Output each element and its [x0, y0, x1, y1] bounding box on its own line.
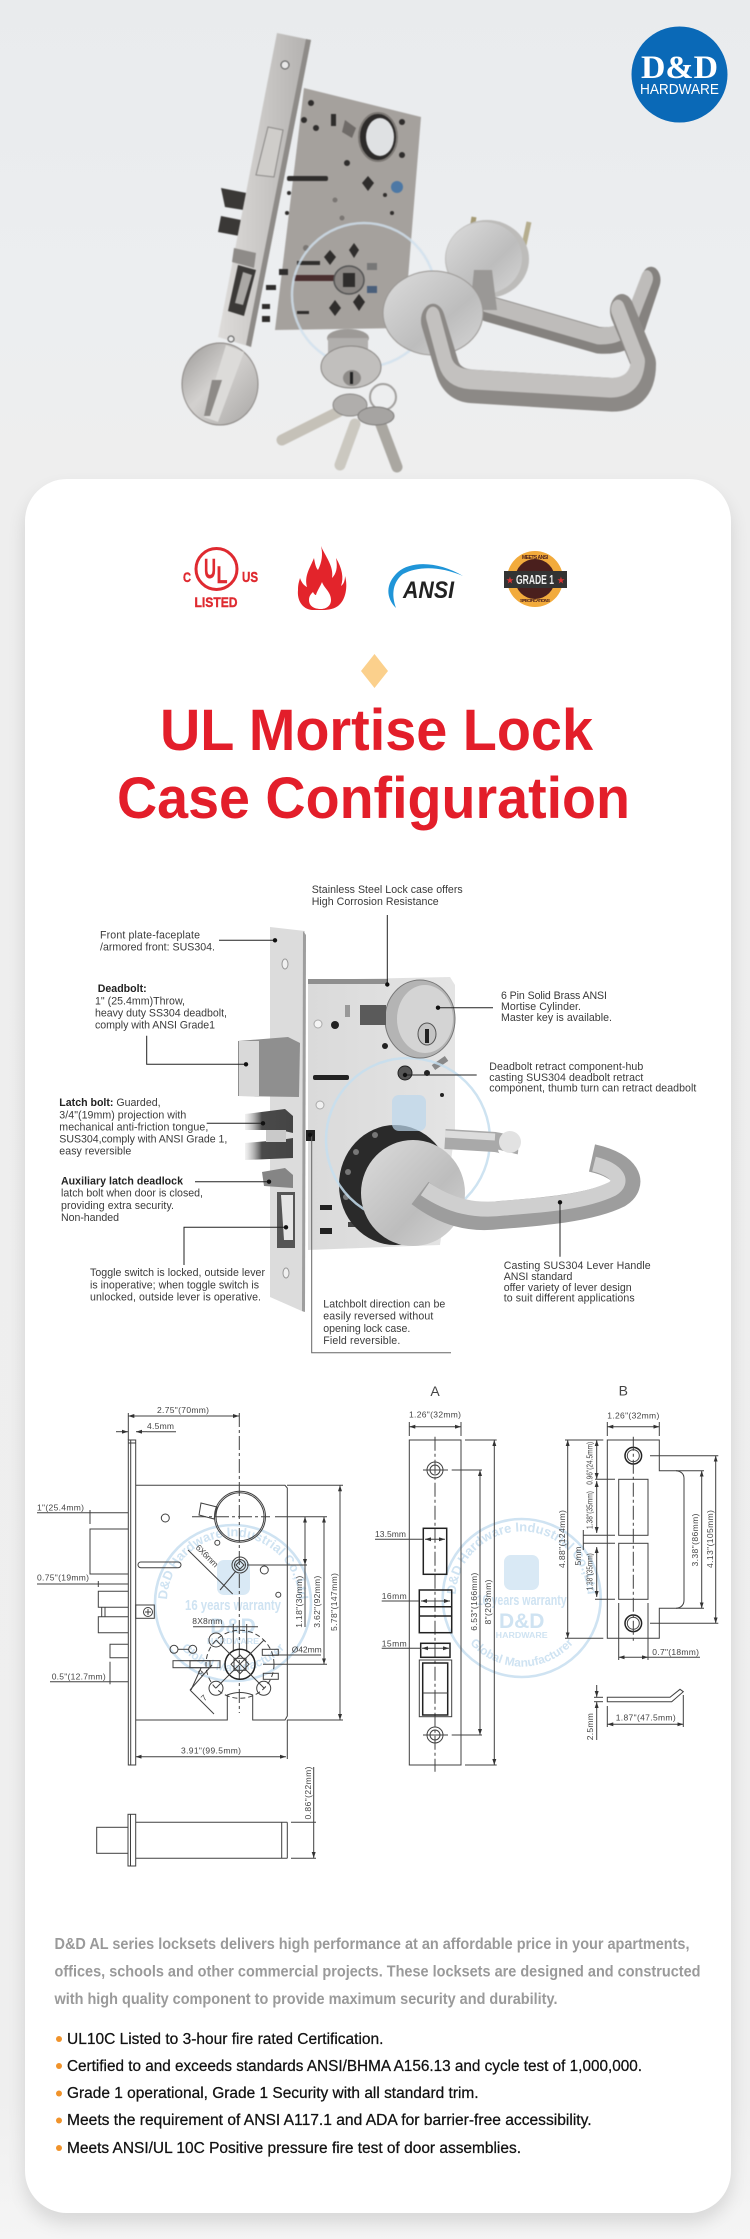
deadbolt outline: 1"(25.4mm) [37, 1503, 84, 1513]
faceplate side [128, 1440, 136, 1765]
deadbolt over plate [238, 1037, 300, 1097]
callout: deadbolt retract: component, thumb turn can retract deadbolt [489, 1083, 696, 1095]
front rose [383, 271, 483, 355]
callout: auxiliary latch: Non-handed [61, 1212, 119, 1224]
label B: B [619, 1382, 628, 1398]
rear lever [486, 279, 651, 340]
dim 1.26 B [607, 1410, 659, 1436]
callout: latch bolt: 3/4"(19mm) projection with [59, 1109, 186, 1121]
dark recess under lever rose [339, 1125, 451, 1245]
cylinder hole [359, 113, 397, 161]
strike windows [619, 1479, 648, 1660]
callout: latch bolt: easy reversible [59, 1146, 131, 1158]
lever rose [361, 1140, 465, 1246]
dim 4.5mm [116, 1421, 176, 1432]
text block: intro paragraph: with high quality component to provide maximum security and durability. [54, 1991, 557, 2008]
strike outline [607, 1440, 684, 1638]
left dims: 4.88"(124mm) [557, 1510, 567, 1568]
dim 1.18: 1.18"(30mm) [294, 1576, 304, 1628]
body outline [136, 1485, 287, 1720]
callout: lever handle: Casting SUS304 Lever Handle [504, 1260, 651, 1272]
watermark: drawing right: D&D [499, 1610, 544, 1633]
thumb turn [182, 343, 258, 425]
Ø42 dim: Ø42mm [292, 1645, 322, 1655]
icon: UL listed: U [204, 553, 216, 584]
bullet 3: Grade 1 operational, Grade 1 Security with all standard trim. [67, 2085, 479, 2102]
watermark: drawing right [441, 1518, 602, 1678]
label 13.5mm [375, 1529, 445, 1539]
screw box [136, 1605, 154, 1618]
technical drawing: lock case side [37, 1405, 343, 1866]
upper hub [188, 1550, 307, 1594]
callout: latch bolt: mechanical anti-friction tongue, [59, 1121, 208, 1133]
icon: Grade 1 badge: ★ [557, 576, 565, 585]
callout: latchbolt direction [308, 1133, 451, 1353]
callout: auxiliary latch: latch bolt when door is closed, [61, 1188, 203, 1200]
product photo: lock set [182, 33, 651, 467]
7 / 9 dims [190, 1665, 214, 1714]
callout: auxiliary latch: providing extra security. [61, 1200, 174, 1212]
icon: Grade 1 badge [504, 551, 567, 607]
watermark ring on lock [326, 1058, 490, 1222]
dim 6.53: 6.53"(166mm) [469, 1573, 479, 1631]
top view of case [97, 1766, 316, 1866]
callout: cylinder [436, 990, 612, 1024]
auxiliary opening [421, 1643, 450, 1657]
watermark: drawing right: 16 years warranty [477, 1593, 567, 1609]
faceplate [218, 33, 311, 347]
watermark logo on lock [392, 1095, 426, 1131]
dim 0.7 [619, 1647, 700, 1657]
left dims: 1.38"(35mm) [584, 1553, 594, 1590]
left dims: 1.38"(35mm) [584, 1491, 594, 1529]
dim 2.5mm [585, 1685, 603, 1740]
icon: UL listed: C [183, 569, 191, 585]
icon: Grade 1 badge: MEETS ANSI [522, 555, 549, 561]
icon: Grade 1 badge: GRADE 1 [516, 572, 554, 587]
watermark: drawing left: HARDWARE [207, 1637, 260, 1646]
faceplate edge [246, 39, 311, 347]
callout: cylinder: Master key is available. [501, 1012, 612, 1024]
callout: lever handle [504, 1200, 651, 1305]
callout: cylinder: 6 Pin Solid Brass ANSI [501, 990, 607, 1002]
icon: ANSI [388, 564, 463, 608]
watermark: drawing left [154, 1524, 312, 1682]
logo: D&D Hardware [632, 26, 728, 122]
7 / 9 dims: 7 [199, 1692, 209, 1703]
left dims: 0.96"(24.5mm) [584, 1442, 594, 1485]
cylinder [321, 329, 381, 388]
dim 1.26 A [409, 1410, 461, 1436]
dim 2.75: 2.75"(70mm) [157, 1405, 209, 1415]
strike side view: 1.87"(47.5mm) [616, 1713, 676, 1723]
plate outline [409, 1440, 461, 1765]
callout: latch bolt: SUS304,comply with ANSI Grade 1, [59, 1134, 227, 1146]
bullet 5: Meets ANSI/UL 10C Positive pressure fire test of door assemblies. [67, 2140, 521, 2157]
dim 1.26 B: 1.26"(32mm) [607, 1410, 659, 1420]
callout: deadbolt retract: casting SUS304 deadbolt retract [489, 1072, 643, 1084]
dim 8: 8"(203mm) [483, 1579, 493, 1624]
watermark: drawing right: HARDWARE [496, 1631, 548, 1640]
left dims [557, 1440, 615, 1638]
Ø42 dim [263, 1645, 327, 1664]
title: Case Configuration [117, 766, 630, 831]
callout: toggle switch: is inoperative; when toggle switch is [90, 1279, 259, 1291]
callout: lock case: High Corrosion Resistance [312, 896, 439, 908]
dim 1.18 [294, 1517, 305, 1628]
callout: auxiliary latch [61, 1176, 271, 1224]
auxiliary outline: 0.5"(12.7mm) [52, 1671, 106, 1681]
callout: deadbolt: Deadbolt: [98, 983, 147, 995]
lever handle [420, 1158, 626, 1216]
decorative diamond [361, 654, 388, 688]
strike holes [625, 1437, 642, 1643]
strike side view [607, 1689, 683, 1727]
dim 2.5mm: 2.5mm [585, 1713, 595, 1740]
right dims: 3.38"(86mm) [690, 1513, 700, 1566]
callout: lock case: Stainless Steel Lock case offers [312, 884, 463, 896]
icon: Grade 1 badge: ★ [506, 576, 514, 585]
body top shadow [308, 979, 388, 984]
watermark: drawing right: Global Manufacturer [472, 1639, 572, 1667]
icon: Grade 1 badge: SPECIFICATIONS [520, 598, 550, 603]
diagram: annotated mortise lock [59, 884, 696, 1353]
icon: ANSI: ANSI [402, 577, 455, 604]
icon: flame [298, 546, 346, 610]
label A: A [430, 1383, 440, 1399]
keys [282, 384, 397, 467]
callout: lever handle: to suit different applications [504, 1293, 635, 1305]
toggle opening [419, 1660, 452, 1717]
callout: toggle switch [90, 1225, 288, 1303]
logo: D&D Hardware: D&D [641, 50, 718, 86]
spindle hub [334, 266, 364, 294]
icon: UL listed [183, 548, 258, 610]
rear lever [445, 1131, 521, 1153]
dim 5.78: 5.78"(147mm) [329, 1573, 339, 1631]
label 15mm [382, 1639, 449, 1649]
latch outline: 0.75"(19mm) [37, 1573, 89, 1583]
watermark ring on photo [292, 223, 436, 367]
cylinder cam [360, 1005, 386, 1025]
text block: intro paragraph [54, 1936, 700, 2008]
callout: deadbolt: heavy duty SS304 deadbolt, [95, 1007, 227, 1019]
dim 1.26 A: 1.26"(32mm) [409, 1410, 461, 1420]
right dims [650, 1456, 718, 1623]
icon: UL listed: L [216, 562, 228, 589]
callout: toggle switch: unlocked, outside lever is operative. [90, 1291, 261, 1303]
callout: front plate: /armored front: SUS304. [100, 941, 215, 953]
label 16mm: 16mm [382, 1591, 407, 1601]
front lever [433, 309, 644, 395]
callout: deadbolt: 1" (25.4mm)Throw, [95, 995, 185, 1007]
callout: latch bolt [59, 1097, 265, 1158]
callout: auxiliary latch: Auxiliary latch deadlock [61, 1176, 183, 1188]
bullet 4: Meets the requirement of ANSI A117.1 and ADA for barrier-free accessibility. [67, 2112, 592, 2129]
watermark: drawing left: D&D [210, 1615, 256, 1638]
toggle opening [277, 1192, 295, 1248]
technical drawing B: strike plate [557, 1382, 718, 1740]
callout: latchbolt direction: Field reversible. [323, 1335, 400, 1347]
panel: white content card [25, 479, 731, 2213]
latch over plate [245, 1109, 293, 1160]
label 13.5mm: 13.5mm [375, 1529, 406, 1539]
rear rose with pins [445, 217, 529, 310]
logo: D&D Hardware: HARDWARE [640, 81, 719, 98]
callout: front plate [100, 929, 277, 953]
callouts [59, 884, 696, 1353]
holes [138, 1514, 281, 1597]
body details [306, 1005, 448, 1234]
latch opening [419, 1590, 452, 1633]
icon: UL listed: LISTED [194, 594, 238, 610]
watermark: drawing left: 16 years warranty [185, 1598, 281, 1614]
8x8 dim [192, 1616, 258, 1650]
deadbolt face [239, 1041, 259, 1096]
title [117, 698, 630, 831]
case cutouts [262, 100, 405, 322]
deadbolt opening [423, 1528, 447, 1574]
screws [282, 959, 289, 1278]
left dims: 5mm [573, 1546, 583, 1566]
hub square [343, 273, 355, 287]
7 / 9 dims: 9 [196, 1667, 206, 1678]
dim 0.7: 0.7"(18mm) [652, 1647, 699, 1657]
deadbolt outline [37, 1503, 128, 1574]
callout: latchbolt direction: easily reversed without [323, 1311, 433, 1323]
callout: lock case [312, 884, 463, 987]
main hub [206, 1630, 274, 1698]
watermark: drawing right: D&D Hardware Industrial Co.,Ltd [446, 1522, 596, 1594]
technical drawing A: faceplate [375, 1383, 497, 1772]
callout: lever handle: offer variety of lever design [504, 1282, 632, 1294]
list: features [56, 2031, 642, 2157]
dim 2.75 [128, 1405, 239, 1440]
top view of case: 0.86"(22mm) [303, 1766, 313, 1820]
8x8 dim: 8X8mm [192, 1616, 222, 1626]
dim 4.5mm: 4.5mm [147, 1421, 174, 1431]
icon: UL listed: US [242, 569, 258, 586]
cylinder bore [199, 1491, 266, 1542]
mortise case body [275, 88, 421, 330]
recess dots [343, 1132, 378, 1200]
bullet 2: Certified to and exceeds standards ANSI/BHMA A156.13 and cycle test of 1,000,000. [67, 2058, 642, 2075]
callout: front plate: Front plate-faceplate [100, 929, 200, 941]
plate details [228, 61, 289, 342]
auxiliary latch [262, 1168, 293, 1188]
text block: intro paragraph: offices, schools and other commercial projects. These locksets are designed and constructed [54, 1964, 700, 1980]
faceplate [270, 927, 305, 1312]
dim 3.91: 3.91"(99.5mm) [181, 1745, 241, 1755]
callout: latch bolt: Latch bolt: Guarded, [59, 1097, 161, 1109]
deadbolt prongs [218, 188, 267, 240]
right dims: 4.13"(105mm) [705, 1510, 715, 1568]
callout: deadbolt retract [403, 1061, 696, 1095]
centre line [434, 1437, 436, 1772]
callout: latchbolt direction: Latchbolt direction can be [323, 1299, 445, 1311]
callout: toggle switch: Toggle switch is locked, outside lever [90, 1267, 265, 1279]
screws [423, 1462, 448, 1743]
latch outline [37, 1573, 128, 1633]
callout: cylinder: Mortise Cylinder. [501, 1001, 581, 1013]
auxiliary outline [50, 1644, 128, 1684]
label 15mm: 15mm [382, 1639, 407, 1649]
hole inner [366, 118, 394, 156]
centre lines [192, 1413, 270, 1713]
faceplate edge [302, 931, 306, 1312]
dim 3.62: 3.62"(92mm) [312, 1576, 322, 1628]
bullet 1: UL10C Listed to 3-hour fire rated Certification. [67, 2031, 384, 2048]
small bars [170, 1645, 278, 1679]
callout: deadbolt retract: Deadbolt retract component-hub [489, 1061, 643, 1073]
text block: intro paragraph: D&D AL series locksets delivers high performance at an affordable price in your apartments, [54, 1936, 690, 1953]
watermark: drawing left: D&D Hardware Industrial Co.,Ltd [158, 1528, 308, 1599]
callout: latchbolt direction: opening lock case. [323, 1323, 410, 1335]
title: UL Mortise Lock [160, 698, 593, 763]
watermark: drawing left: Global Manufacturer [183, 1644, 284, 1672]
callout: deadbolt [95, 983, 248, 1067]
callout: deadbolt: comply with ANSI Grade1 [95, 1019, 215, 1031]
callout: lever handle: ANSI standard [504, 1271, 572, 1283]
cylinder [385, 980, 455, 1058]
6X6mm label: 6X6mm [194, 1542, 221, 1569]
lock body [308, 977, 455, 1250]
label 16mm [382, 1591, 450, 1601]
